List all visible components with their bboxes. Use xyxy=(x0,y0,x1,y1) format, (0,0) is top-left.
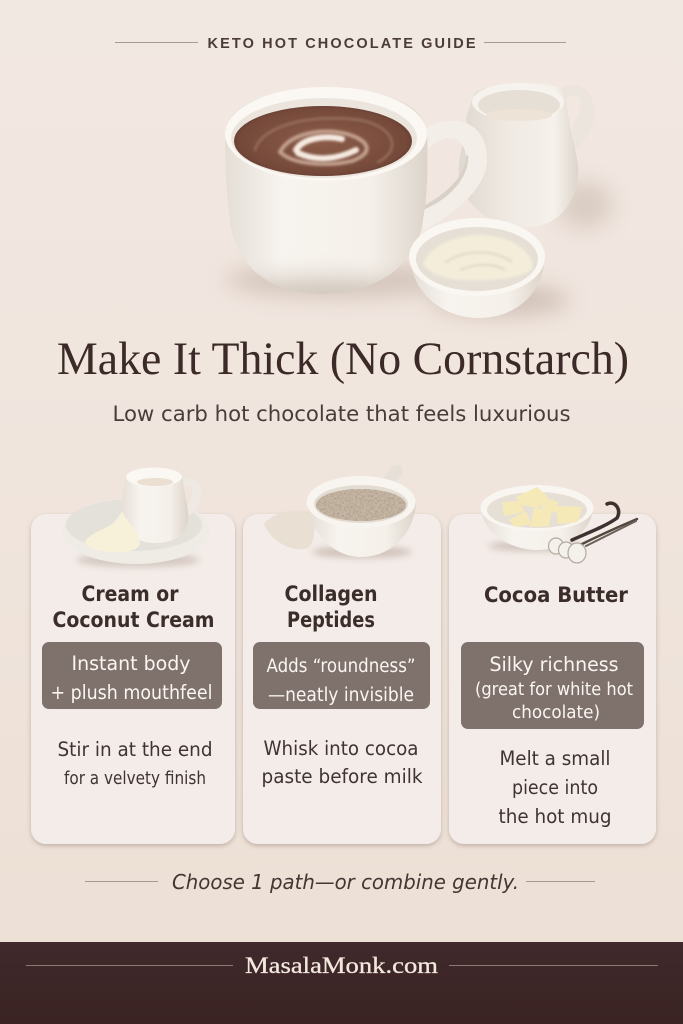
heading: Coconut Cream xyxy=(52,608,214,632)
icon: bowl of collagen powder with spoon xyxy=(264,465,416,558)
instruction: piece into xyxy=(512,776,598,799)
mug underside shading xyxy=(258,268,390,294)
benefit badge xyxy=(42,642,222,709)
panel: cream or coconut cream xyxy=(31,468,235,844)
panel: cocoa butter xyxy=(449,485,656,844)
heading: Peptides xyxy=(287,608,375,632)
card background xyxy=(449,514,656,844)
footer band xyxy=(0,942,683,1024)
benefit badge xyxy=(461,642,644,729)
latte swirl xyxy=(255,118,392,164)
benefit badge: + plush mouthfeel xyxy=(50,681,212,704)
pitcher xyxy=(459,82,594,227)
instruction: the hot mug xyxy=(498,805,612,828)
mug handle xyxy=(423,121,487,231)
soft shadows xyxy=(225,262,455,298)
benefit badge: —neatly invisible xyxy=(268,685,414,706)
benefit badge: Instant body xyxy=(72,652,190,675)
mug body xyxy=(225,87,427,294)
hero image: mug, pitcher and cream bowl xyxy=(225,82,613,318)
cream bowl xyxy=(409,218,545,318)
benefit badge: (great for white hot xyxy=(475,680,633,700)
heading: Cocoa Butter xyxy=(484,583,629,607)
benefit badge: Silky richness xyxy=(490,653,618,676)
icon: bowl of cocoa butter with vanilla xyxy=(480,485,637,563)
benefit badge xyxy=(253,642,430,709)
panel: collagen peptides xyxy=(243,465,441,844)
card background xyxy=(243,514,441,844)
instruction: for a velvety finish xyxy=(64,769,206,789)
subtitle: Low carb hot chocolate that feels luxurious xyxy=(112,402,570,426)
top label: KETO HOT CHOCOLATE GUIDE xyxy=(208,36,476,52)
instruction: paste before milk xyxy=(262,765,423,788)
closing note: Choose 1 path—or combine gently. xyxy=(172,870,519,894)
heading: Cream or xyxy=(82,582,179,606)
instruction: Whisk into cocoa xyxy=(264,737,418,760)
instruction: Melt a small xyxy=(500,747,610,770)
benefit badge: Adds “roundness” xyxy=(266,656,416,677)
card background xyxy=(31,514,235,844)
mug rim xyxy=(225,87,427,181)
main title: Make It Thick (No Cornstarch) xyxy=(57,333,629,385)
chocolate surface xyxy=(234,106,412,176)
icon: pitcher on saucer with cream xyxy=(62,468,210,567)
heading: Collagen xyxy=(284,582,378,606)
website: MasalaMonk.com xyxy=(245,953,438,979)
benefit badge: chocolate) xyxy=(512,703,600,723)
instruction: Stir in at the end xyxy=(58,738,212,761)
